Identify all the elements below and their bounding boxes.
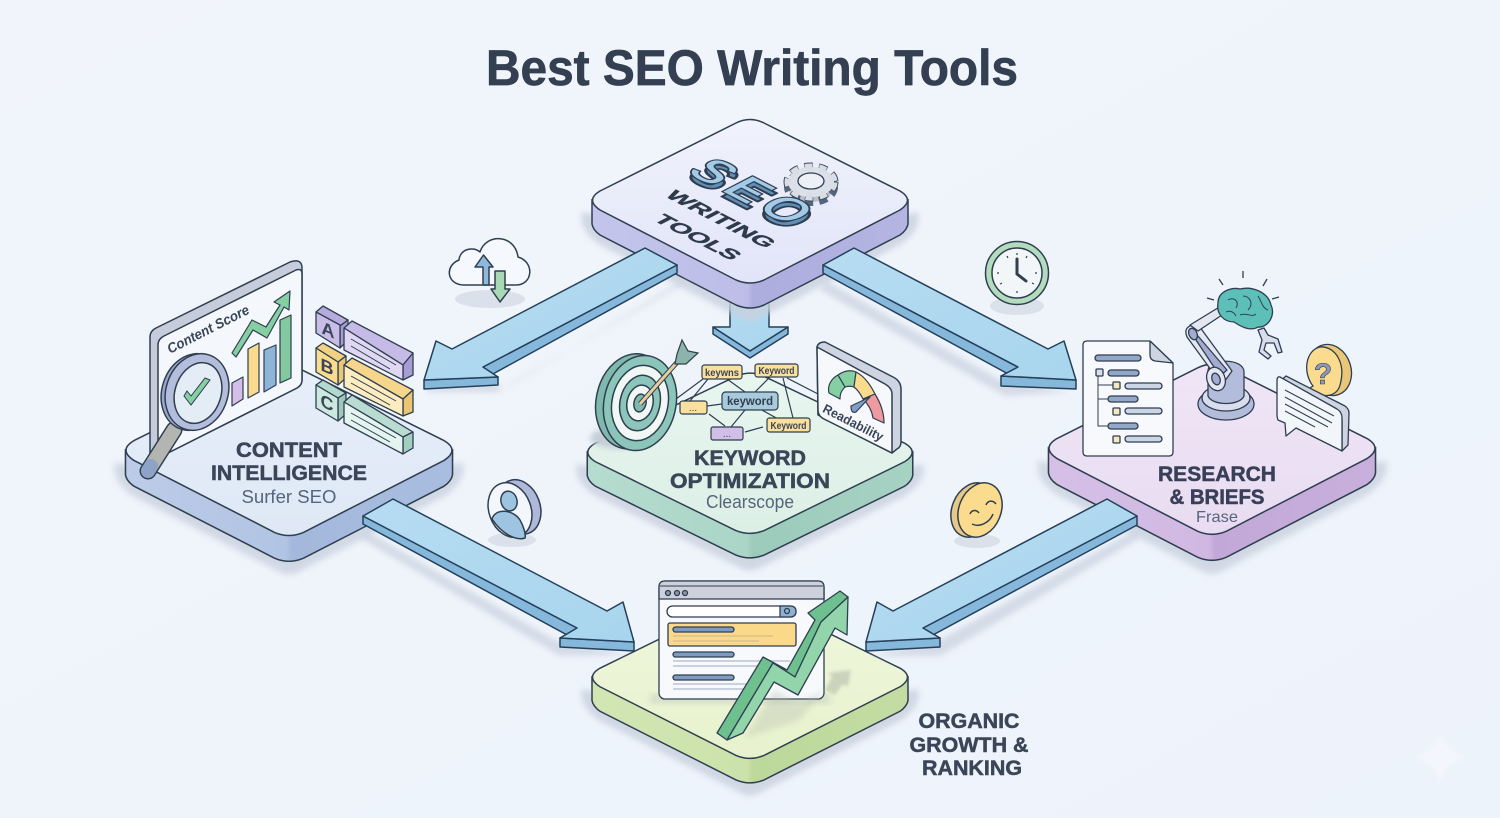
icon: chat bubble <box>1277 376 1349 451</box>
text: writing tools: TOOLS <box>648 212 746 263</box>
text: research and briefs label <box>1158 463 1276 526</box>
text: research and briefs label: & BRIEFS <box>1170 486 1264 509</box>
card A <box>316 306 413 380</box>
text: keyword optimization label: OPTIMIZATION <box>670 470 830 493</box>
text: organic growth label: GROWTH & <box>910 734 1028 757</box>
panel: SEO writing tools hub <box>581 120 919 321</box>
growth arrow <box>717 591 851 740</box>
node: central keyword <box>722 392 778 410</box>
panel: research and briefs <box>1037 364 1387 574</box>
arrow: content intelligence to organic growth <box>360 499 634 656</box>
readability gauge card <box>817 342 901 453</box>
node: purple ellipsis <box>711 427 743 440</box>
card B: B <box>321 354 333 380</box>
icon: question coin: ? <box>1314 358 1332 391</box>
icon: gear <box>788 167 834 202</box>
bar chart <box>232 315 291 406</box>
keyword network <box>676 364 820 440</box>
arrow: research and briefs to organic growth <box>866 499 1140 656</box>
card A: A <box>322 317 335 343</box>
text: research and briefs label: Frase <box>1196 509 1238 526</box>
icon: magnifier <box>148 345 239 471</box>
node: keywns: keywns <box>705 368 739 379</box>
document outline <box>1083 341 1173 456</box>
text: content intelligence label: Surfer SEO <box>242 487 336 507</box>
text: keyword optimization label: Clearscope <box>706 492 794 512</box>
card C <box>316 380 413 454</box>
icon: target with dart <box>587 340 698 457</box>
arrow: hub to content intelligence <box>424 248 690 392</box>
node: yellow ellipsis <box>680 401 707 414</box>
text: keyword optimization label: KEYWORD <box>694 447 806 470</box>
icon: question coin <box>1302 339 1358 401</box>
SEO 3D lettering: SEO <box>674 156 834 239</box>
node: Keyword top: Keyword <box>758 366 794 377</box>
node: Keyword bottom <box>767 418 810 432</box>
text: content intelligence label: INTELLIGENCE <box>211 462 367 485</box>
center arrow to keyword panel <box>713 290 788 358</box>
panel: content intelligence <box>114 367 464 575</box>
node: yellow ellipsis: ... <box>689 403 697 414</box>
trend arrow <box>232 291 290 357</box>
icon: robot arm with brain <box>1186 271 1282 420</box>
node: central keyword: keyword <box>727 394 773 408</box>
arrow: hub to research and briefs <box>820 248 1076 396</box>
card C: C <box>321 390 334 416</box>
gauge arc <box>829 371 884 423</box>
text: research and briefs label: RESEARCH <box>1158 463 1276 486</box>
text: organic growth label <box>910 710 1028 780</box>
icon: cloud sync <box>449 239 530 308</box>
readability gauge card: Readability <box>820 401 887 445</box>
SEO 3D lettering: SEO <box>674 151 834 234</box>
text: keyword optimization label <box>670 447 830 512</box>
title: Best SEO Writing Tools <box>486 40 1018 96</box>
icon: smiley coin <box>943 476 1010 548</box>
panel: keyword optimization <box>576 373 924 571</box>
content score screen <box>150 261 302 462</box>
browser search results <box>650 581 830 704</box>
icon: clock <box>986 242 1048 315</box>
text: writing tools <box>648 188 781 263</box>
sparkle watermark <box>1416 734 1464 782</box>
text: organic growth label: RANKING <box>922 757 1022 780</box>
ABC cards <box>316 306 413 454</box>
text: content intelligence label: CONTENT <box>236 439 342 462</box>
gripper <box>1258 328 1282 359</box>
card B <box>316 343 413 416</box>
text: content intelligence label <box>211 439 367 507</box>
chart label: Content Score <box>164 301 252 357</box>
panel: organic growth <box>581 598 919 796</box>
node: Keyword bottom: Keyword <box>770 421 806 432</box>
brain <box>1218 288 1273 329</box>
node: purple ellipsis: ... <box>723 429 731 440</box>
text: writing tools: WRITING <box>659 188 781 251</box>
icon: user coin <box>481 474 548 547</box>
text: organic growth label: ORGANIC <box>918 710 1020 733</box>
